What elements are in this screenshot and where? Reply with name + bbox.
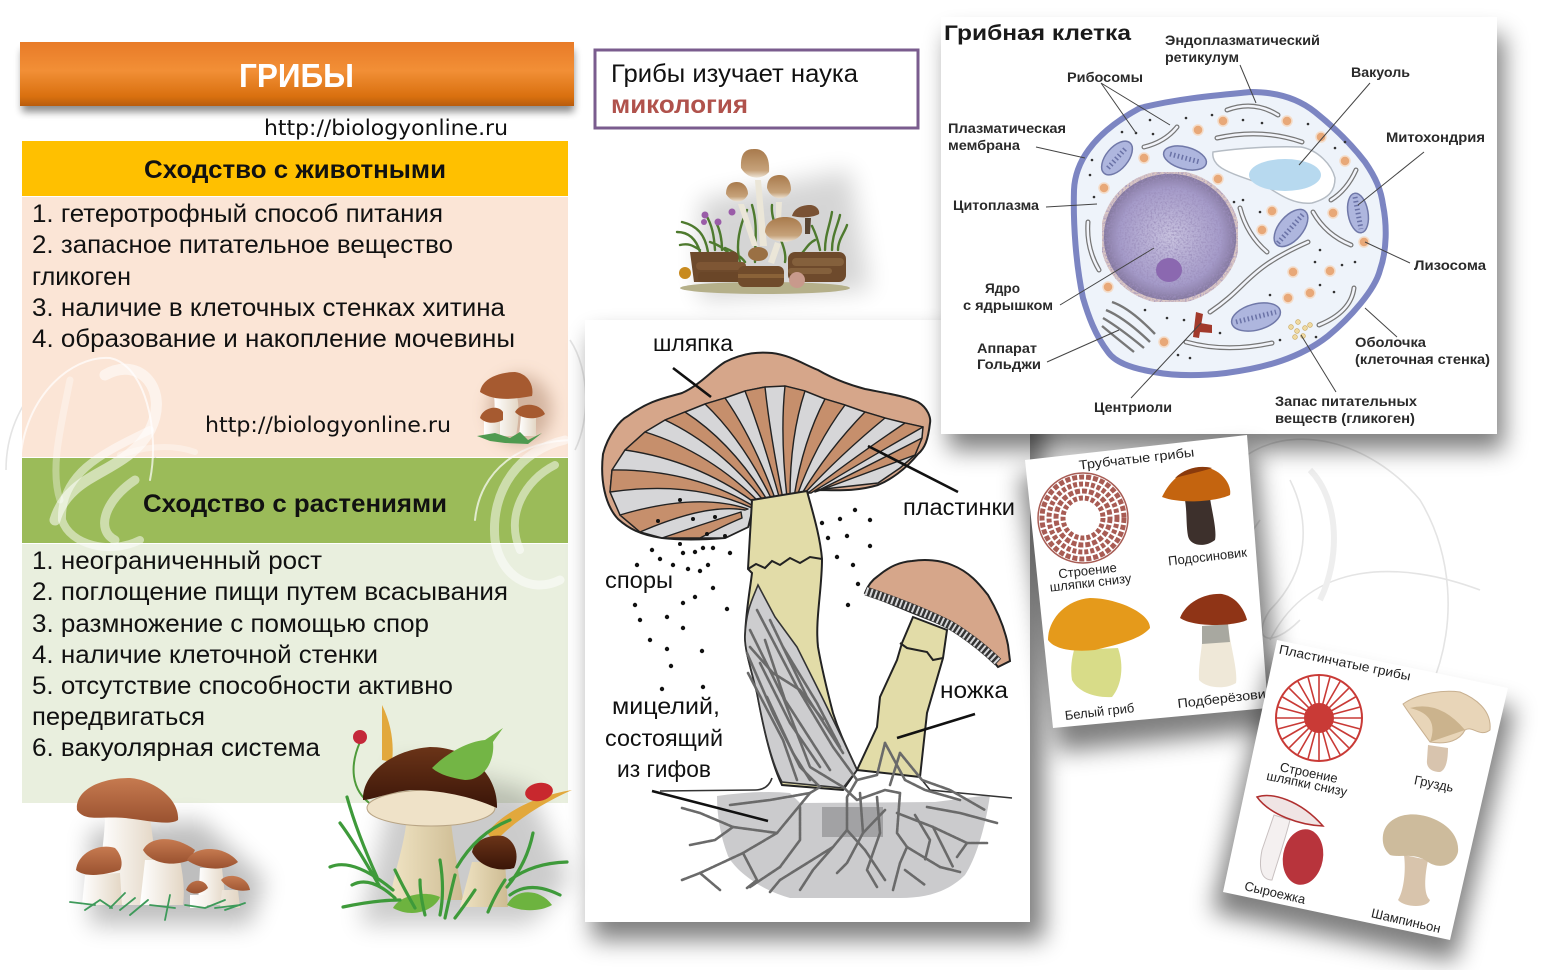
diagram labels: мицелий, bbox=[612, 693, 720, 719]
large mushroom cap bbox=[602, 353, 930, 540]
cell labels: Митохондрия bbox=[1386, 130, 1485, 145]
header: animals bbox=[22, 141, 568, 196]
heading: fungal cell: Грибная клетка bbox=[944, 22, 1131, 45]
list: plants: 3. размножение с помощью спор bbox=[32, 610, 429, 638]
cell leader lines bbox=[1036, 65, 1424, 398]
caps bbox=[363, 747, 497, 808]
mycology callout bbox=[595, 50, 918, 128]
label: birch bolete: Подберёзовик bbox=[1177, 685, 1273, 711]
icon: birch bolete bbox=[1180, 594, 1247, 687]
icon: russula bbox=[1257, 796, 1328, 888]
body: plants bbox=[22, 544, 568, 803]
body: animals bbox=[22, 197, 568, 457]
cell labels: Плазматическая bbox=[948, 121, 1066, 136]
panel: lamellar mushrooms card bbox=[1223, 640, 1508, 940]
cell labels: Цитоплазма bbox=[953, 198, 1040, 213]
label: gill structure: шляпки снизу bbox=[1265, 768, 1349, 799]
icon: orange-cap boletus bbox=[1162, 467, 1230, 545]
list: plants: 2. поглощение пищи путем всасывания bbox=[32, 578, 508, 606]
heading: plants: Сходство с растениями bbox=[143, 490, 447, 518]
panel shadow: tubular card bbox=[1020, 450, 1282, 752]
vacuole bbox=[1213, 147, 1335, 203]
gills bbox=[610, 386, 923, 538]
label: tube structure: шляпки снизу bbox=[1049, 570, 1133, 595]
cell labels: Центриоли bbox=[1094, 400, 1172, 415]
icon: group of mushrooms bottom left bbox=[70, 778, 265, 925]
panel: tubular mushrooms card bbox=[1025, 435, 1273, 728]
panel: similarity with animals bbox=[22, 141, 568, 457]
large mushroom stem bbox=[745, 491, 857, 790]
label: champignon: Шампиньон bbox=[1370, 905, 1442, 936]
cell labels: веществ (гликоген) bbox=[1275, 411, 1415, 426]
cell labels: Запас питательных bbox=[1275, 394, 1418, 409]
mycology callout: микология bbox=[611, 91, 748, 119]
grass bbox=[330, 797, 567, 918]
background watermark swirls bbox=[6, 340, 1480, 690]
diagram labels: состоящий bbox=[605, 725, 723, 751]
list: plants: передвигаться bbox=[32, 703, 205, 731]
diagram labels: шляпка bbox=[653, 330, 733, 356]
label: tube structure bbox=[1049, 560, 1133, 595]
diagram leader lines bbox=[652, 368, 975, 821]
title banner: ГРИБЫ bbox=[239, 57, 354, 94]
icon: porcini bbox=[1048, 598, 1150, 697]
list: plants: 5. отсутствие способности активно bbox=[32, 672, 453, 700]
nucleus bbox=[1102, 172, 1238, 302]
panel: mushroom anatomy diagram bbox=[585, 320, 1030, 922]
cell labels: Вакуоль bbox=[1351, 65, 1410, 80]
ribosomes bbox=[1089, 114, 1356, 359]
label: gill structure: Строение bbox=[1279, 759, 1339, 786]
panel: fungal cell diagram bbox=[941, 17, 1497, 434]
list: plants: 1. неограниченный рост bbox=[32, 547, 323, 575]
icon: large mushroom with leaves bbox=[330, 705, 572, 925]
panel shadow: mushroom diagram bbox=[592, 335, 1044, 940]
label: tube structure: Строение bbox=[1057, 560, 1118, 581]
title banner bbox=[20, 42, 574, 112]
cell wall and cytoplasm bbox=[1074, 92, 1386, 375]
ground leaves bbox=[393, 892, 552, 913]
cell labels: Аппарат bbox=[977, 341, 1037, 356]
cell labels bbox=[948, 33, 1490, 426]
cell labels: Оболочка bbox=[1355, 335, 1427, 350]
mitochondria bbox=[1096, 136, 1371, 336]
small mushroom bbox=[857, 560, 1010, 777]
cell labels: Эндоплазматический bbox=[1165, 33, 1320, 48]
icon: champignon bbox=[1383, 814, 1458, 906]
yellow blades bbox=[382, 705, 572, 842]
list: animals: 3. наличие в клеточных стенках хитина bbox=[32, 294, 505, 322]
list: animals bbox=[32, 200, 515, 353]
white swirl overlays on panels bbox=[20, 358, 575, 585]
list: plants: 4. наличие клеточной стенки bbox=[32, 641, 378, 669]
icon: small mushrooms in animal panel bbox=[477, 372, 552, 445]
panel shadow: lamellar card bbox=[1212, 660, 1515, 962]
glycogen reserve bbox=[1289, 320, 1312, 339]
soil bbox=[660, 778, 1012, 898]
diagram labels: споры bbox=[605, 567, 673, 593]
gill underside bbox=[367, 790, 495, 826]
heading: animals: Сходство с животными bbox=[144, 156, 446, 184]
list: animals: 2. запасное питательное вещество bbox=[32, 231, 453, 259]
icon: milk cap bbox=[1403, 691, 1490, 772]
golgi apparatus bbox=[1102, 302, 1155, 352]
icon: mushrooms on logs bbox=[677, 149, 870, 300]
cell labels: Гольджи bbox=[977, 357, 1041, 372]
lysosomes bbox=[1099, 116, 1369, 347]
spores bbox=[633, 498, 872, 691]
icon: tube pattern disc bbox=[1038, 473, 1128, 563]
cell labels: ретикулум bbox=[1165, 50, 1239, 65]
diagram labels: ножка bbox=[940, 677, 1008, 703]
centrioles bbox=[1193, 312, 1212, 338]
cell labels: (клеточная стенка) bbox=[1355, 352, 1490, 367]
mycelium hyphae bbox=[682, 610, 997, 892]
diagram labels: из гифов bbox=[617, 756, 711, 782]
icon: gill wheel bbox=[1276, 675, 1362, 761]
ladybug bbox=[524, 781, 554, 803]
label: podosinovik: Подосиновик bbox=[1167, 545, 1248, 568]
cell labels: с ядрышком bbox=[963, 298, 1053, 313]
berry and stalk bbox=[354, 742, 372, 805]
list: plants bbox=[32, 547, 508, 762]
source url middle: http://biologyonline.ru bbox=[205, 413, 451, 437]
endoplasmic reticulum bbox=[1088, 106, 1356, 348]
cell labels: Лизосома bbox=[1414, 258, 1487, 273]
card title: tubular: Трубчатые грибы bbox=[1078, 445, 1195, 473]
source url top: http://biologyonline.ru bbox=[264, 116, 508, 140]
cell labels: мембрана bbox=[948, 138, 1021, 153]
card title: lamellar: Пластинчатые грибы bbox=[1278, 642, 1412, 684]
label: white mushroom: Белый гриб bbox=[1064, 700, 1135, 723]
diagram labels: пластинки bbox=[903, 494, 1015, 520]
cell labels: Рибосомы bbox=[1067, 70, 1143, 85]
header: plants bbox=[22, 458, 568, 543]
list: plants: 6. вакуолярная система bbox=[32, 734, 320, 762]
list: animals: гликоген bbox=[32, 263, 131, 291]
list: animals: 4. образование и накопление мочевины bbox=[32, 325, 515, 353]
list: animals: 1. гетеротрофный способ питания bbox=[32, 200, 443, 228]
cell labels: Ядро bbox=[985, 281, 1020, 296]
label: russula: Сыроежка bbox=[1243, 878, 1308, 907]
panel: similarity with plants bbox=[22, 458, 568, 803]
mycology callout: Грибы изучает наука bbox=[611, 60, 858, 88]
diagram labels bbox=[605, 330, 1015, 782]
label: milk cap: Груздь bbox=[1413, 772, 1455, 795]
green leaf on cap bbox=[432, 728, 503, 780]
panel shadow: fungal cell bbox=[948, 35, 1504, 450]
stems bbox=[390, 810, 463, 900]
